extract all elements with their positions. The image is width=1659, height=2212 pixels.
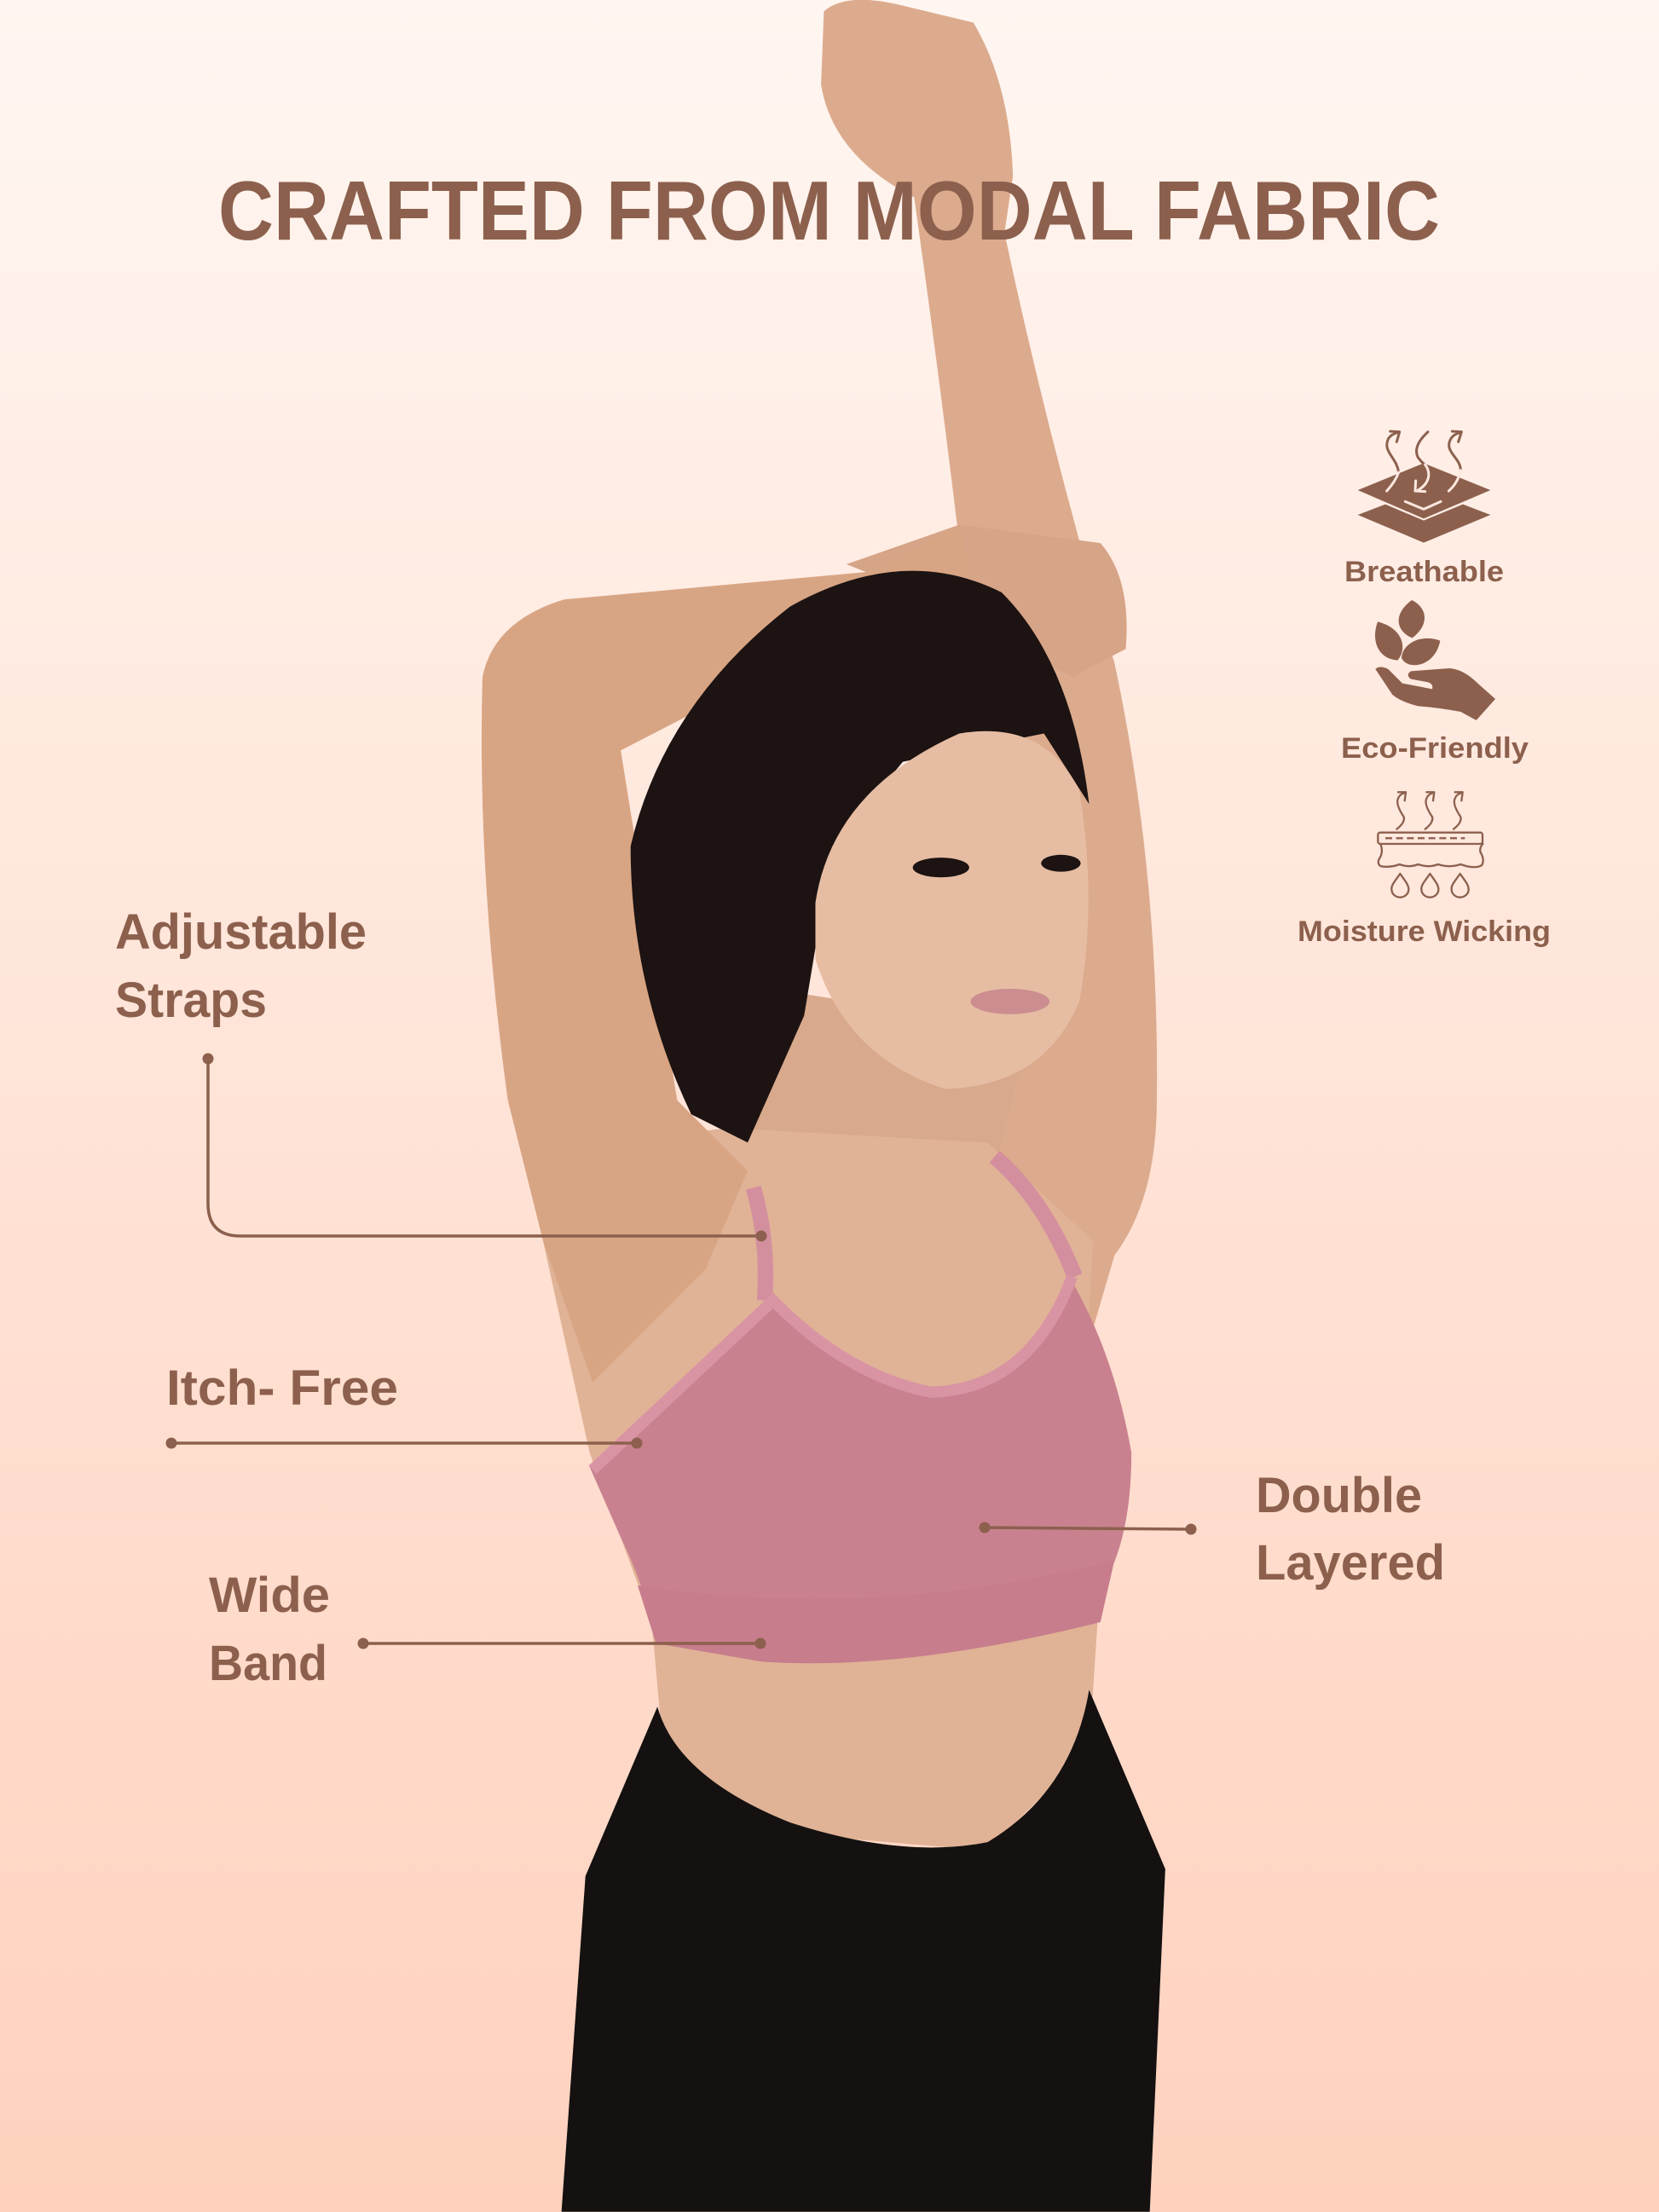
label: Itch-Free: Itch- Free — [166, 1360, 398, 1416]
trousers — [562, 1689, 1165, 2212]
leader line: Double Layered — [979, 1522, 1197, 1534]
torso — [543, 1129, 1129, 1851]
top wide band — [638, 1560, 1114, 1663]
icon: moisture wicking fabric — [1378, 792, 1483, 898]
shoulder straps — [754, 1157, 1075, 1301]
bent arm — [482, 525, 974, 1383]
label: Adjustable Straps: Adjustable — [115, 904, 367, 960]
label: Moisture Wicking: Moisture Wicking — [1298, 915, 1551, 948]
icon: leaves in a hand — [1375, 600, 1495, 720]
raised arm and hand — [821, 0, 1157, 1361]
title: CRAFTED FROM MODAL FABRIC — [218, 164, 1440, 257]
top body — [590, 1277, 1131, 1637]
leader line: Wide Band — [358, 1638, 766, 1649]
label: Wide Band: Band — [209, 1636, 327, 1691]
leader line: Itch-Free — [165, 1437, 643, 1449]
figure: stylised model wearing the top — [482, 0, 1165, 2212]
label: Double Layered — [1256, 1468, 1445, 1591]
label: Double Layered: Double — [1256, 1468, 1422, 1523]
label: Wide Band — [209, 1568, 330, 1691]
label: Adjustable Straps — [115, 904, 367, 1028]
label: Double Layered: Layered — [1256, 1535, 1445, 1591]
hand behind head — [847, 525, 1127, 677]
eyes — [913, 855, 1081, 877]
icon: breathable fabric layers — [1358, 431, 1490, 543]
top neckline binding — [592, 1277, 1072, 1470]
neck — [733, 987, 1030, 1170]
face — [815, 731, 1089, 1089]
label: Breathable: Breathable — [1344, 556, 1504, 588]
leader line: Adjustable Straps — [203, 1054, 767, 1241]
label: Eco-Friendly: Eco-Friendly — [1341, 732, 1529, 765]
mouth — [971, 989, 1049, 1014]
label: Adjustable Straps: Straps — [115, 973, 267, 1028]
hair — [631, 571, 1090, 1142]
label: Wide Band: Wide — [209, 1568, 330, 1623]
